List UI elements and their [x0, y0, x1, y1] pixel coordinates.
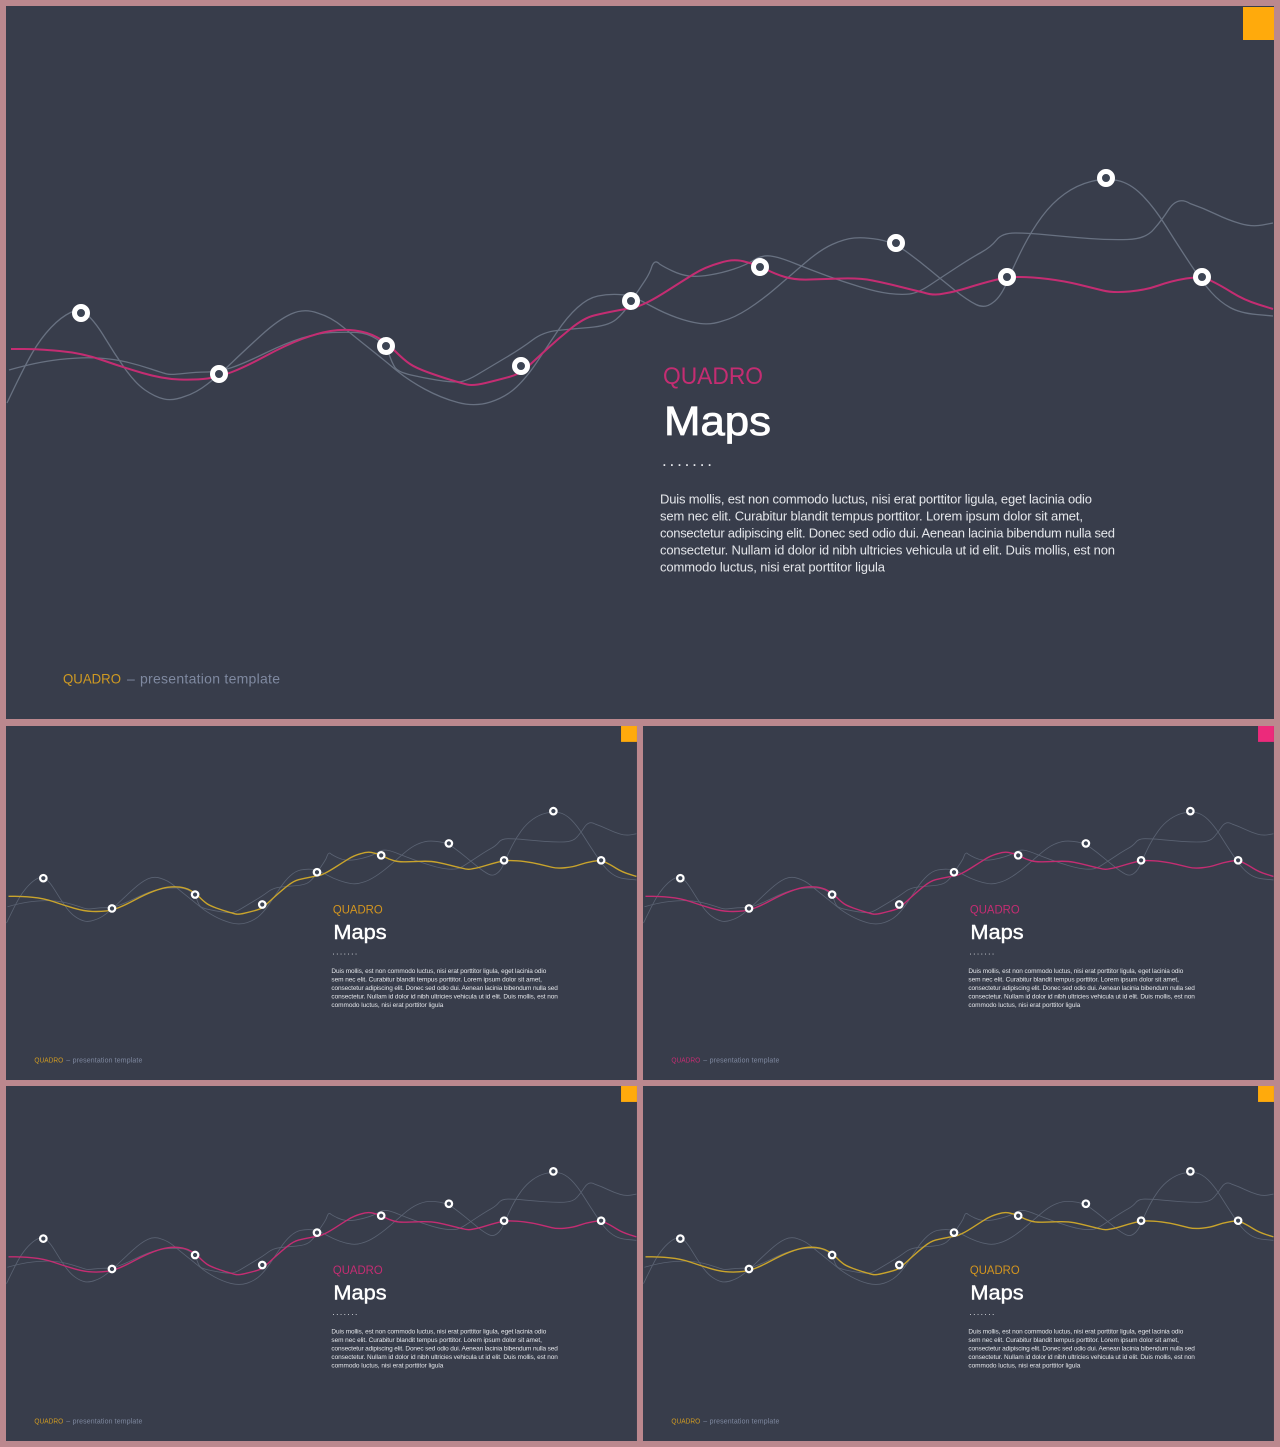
title: Maps — [333, 1283, 387, 1305]
body text: consectetur adipiscing elit. Donec sed odio dui. Aenean lacinia bibendum nulla sed — [331, 985, 558, 992]
footer label: QUADRO — [671, 1418, 701, 1425]
footer label: QUADRO — [63, 670, 121, 686]
body text — [331, 968, 558, 1009]
footer label: QUADRO — [671, 1057, 701, 1064]
eyebrow heading: QUADRO — [970, 903, 1020, 917]
title: Maps — [970, 1283, 1024, 1305]
body text: consectetur. Nullam id dolor id nibh ultricies vehicula ut id elit. Duis mollis, est non — [968, 1354, 1195, 1361]
body text: commodo luctus, nisi erat porttitor ligula — [968, 1002, 1081, 1009]
body text: consectetur. Nullam id dolor id nibh ultricies vehicula ut id elit. Duis mollis, est non — [331, 993, 558, 1000]
footer label: – — [703, 1057, 707, 1064]
body text: consectetur. Nullam id dolor id nibh ultricies vehicula ut id elit. Duis mollis, est non — [660, 542, 1115, 558]
body text: Duis mollis, est non commodo luctus, nisi erat porttitor ligula, eget lacinia odio — [331, 1329, 547, 1336]
dotted divider: ....... — [332, 1307, 357, 1317]
body text: Duis mollis, est non commodo luctus, nisi erat porttitor ligula, eget lacinia odio — [968, 1329, 1184, 1336]
body text — [968, 968, 1195, 1009]
eyebrow heading: QUADRO — [970, 1263, 1020, 1277]
footer label: QUADRO — [34, 1418, 64, 1425]
footer label: – — [127, 670, 135, 686]
footer label: presentation template — [73, 1057, 142, 1064]
dotted divider: ....... — [662, 451, 712, 470]
title: Maps — [970, 922, 1024, 944]
body text: consectetur adipiscing elit. Donec sed odio dui. Aenean lacinia bibendum nulla sed — [331, 1346, 558, 1353]
body text: commodo luctus, nisi erat porttitor ligula — [331, 1363, 444, 1370]
body text: commodo luctus, nisi erat porttitor ligula — [968, 1363, 1081, 1370]
icon: orange corner square — [1258, 1086, 1274, 1102]
footer label: – — [66, 1057, 70, 1064]
footer label: QUADRO — [34, 1057, 64, 1064]
map markers — [74, 172, 1208, 380]
icon: orange corner square — [621, 726, 637, 742]
eyebrow heading: QUADRO — [333, 1263, 383, 1277]
map markers — [677, 1168, 1241, 1272]
footer label: presentation template — [710, 1057, 779, 1064]
footer label — [671, 1418, 779, 1425]
dotted divider: ....... — [969, 946, 994, 956]
body text: sem nec elit. Curabitur blandit tempus porttitor. Lorem ipsum dolor sit amet, — [968, 1337, 1179, 1344]
footer label: presentation template — [73, 1418, 142, 1425]
body text: commodo luctus, nisi erat porttitor ligula — [331, 1002, 444, 1009]
footer label — [34, 1057, 142, 1064]
icon: pink corner square — [1258, 726, 1274, 742]
panel: small slide, yellow line — [6, 726, 637, 1080]
footer label — [671, 1057, 779, 1064]
body text — [331, 1329, 558, 1370]
footer label: presentation template — [140, 670, 280, 686]
body text: consectetur adipiscing elit. Donec sed odio dui. Aenean lacinia bibendum nulla sed — [968, 985, 1195, 992]
footer label — [63, 670, 280, 686]
map markers — [40, 1168, 604, 1272]
line chart: grey and magenta route lines — [643, 812, 1273, 924]
panel: small slide, magenta accent — [643, 726, 1274, 1080]
panel: small slide, yellow line with orange square — [643, 1086, 1274, 1441]
dotted divider: ....... — [969, 1307, 994, 1317]
title: Maps — [333, 922, 387, 944]
line chart: grey and magenta route lines — [7, 179, 1273, 405]
eyebrow heading: QUADRO — [333, 903, 383, 917]
body text: consectetur adipiscing elit. Donec sed odio dui. Aenean lacinia bibendum nulla sed — [968, 1346, 1195, 1353]
body text: sem nec elit. Curabitur blandit tempus porttitor. Lorem ipsum dolor sit amet, — [660, 508, 1083, 524]
footer label — [34, 1418, 142, 1425]
icon: orange corner square — [1243, 7, 1274, 40]
panel: main slide — [6, 6, 1274, 719]
line chart: grey and yellow route lines — [643, 1172, 1273, 1284]
footer label: – — [66, 1418, 70, 1425]
icon: orange corner square — [621, 1086, 637, 1102]
body text — [660, 492, 1115, 574]
body text: Duis mollis, est non commodo luctus, nisi erat porttitor ligula, eget lacinia odio — [968, 968, 1184, 975]
panel: small slide, magenta line with orange square — [6, 1086, 637, 1441]
map markers — [677, 808, 1241, 912]
footer label: presentation template — [710, 1418, 779, 1425]
body text: sem nec elit. Curabitur blandit tempus porttitor. Lorem ipsum dolor sit amet, — [331, 976, 542, 983]
body text: sem nec elit. Curabitur blandit tempus porttitor. Lorem ipsum dolor sit amet, — [968, 976, 1179, 983]
body text: Duis mollis, est non commodo luctus, nisi erat porttitor ligula, eget lacinia odio — [660, 492, 1092, 506]
line chart: grey and yellow route lines — [6, 812, 636, 924]
body text: sem nec elit. Curabitur blandit tempus porttitor. Lorem ipsum dolor sit amet, — [331, 1337, 542, 1344]
body text: Duis mollis, est non commodo luctus, nisi erat porttitor ligula, eget lacinia odio — [331, 968, 547, 975]
body text — [968, 1329, 1195, 1370]
line chart: grey and magenta route lines — [6, 1172, 636, 1284]
body text: consectetur adipiscing elit. Donec sed odio dui. Aenean lacinia bibendum nulla sed — [660, 526, 1115, 540]
eyebrow heading: QUADRO — [663, 363, 763, 390]
dotted divider: ....... — [332, 946, 357, 956]
title: Maps — [664, 398, 771, 444]
body text: commodo luctus, nisi erat porttitor ligula — [660, 560, 886, 574]
map markers — [40, 808, 604, 912]
footer label: – — [703, 1418, 707, 1425]
body text: consectetur. Nullam id dolor id nibh ultricies vehicula ut id elit. Duis mollis, est non — [331, 1354, 558, 1361]
body text: consectetur. Nullam id dolor id nibh ultricies vehicula ut id elit. Duis mollis, est non — [968, 993, 1195, 1000]
